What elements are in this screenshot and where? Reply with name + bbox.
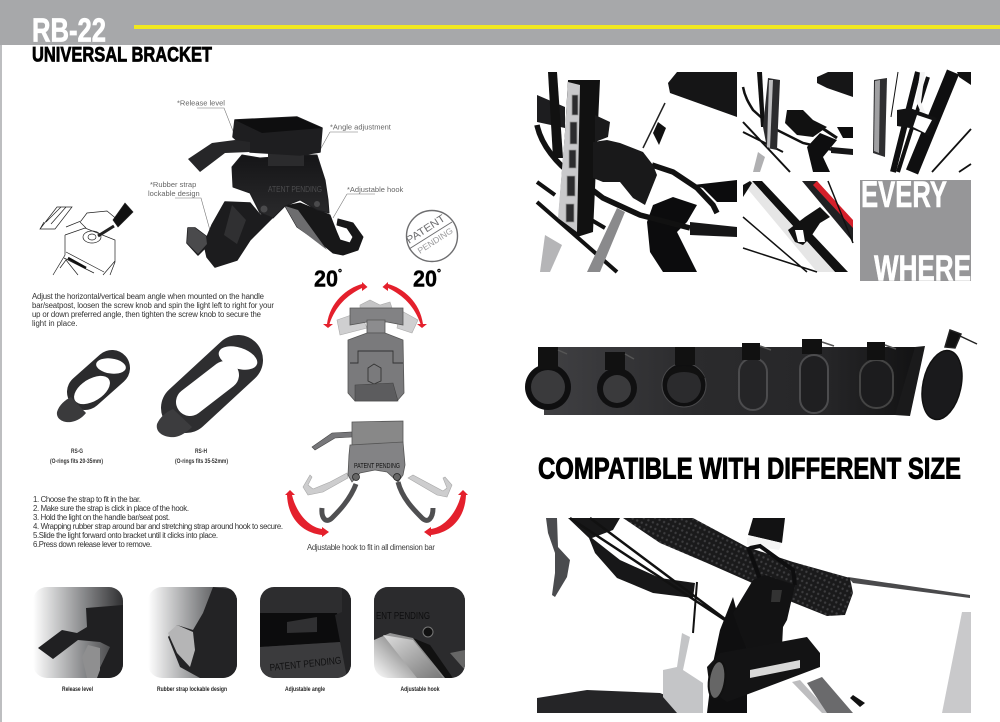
labels: twenty degrees: ° [437, 268, 441, 279]
text block: steps: 4. Wrapping rubber strap around bar and stretching strap around hook to secure. [33, 522, 283, 531]
stamp: patent pending [404, 210, 458, 262]
callout text [148, 98, 404, 198]
photo: handlebar mount [537, 518, 971, 713]
thumbnail: adjustable hook [374, 587, 465, 678]
labels: twenty degrees: 20 [413, 266, 437, 292]
callout text: *Angle adjustment [330, 122, 392, 132]
diagram: adjustable hook front view: PATENT PENDING [354, 463, 400, 470]
arrows: hook red [285, 490, 468, 537]
thumbnail: release level [33, 587, 123, 678]
callout text: *Rubber strap [150, 180, 196, 189]
photo: rear rack mount [743, 181, 853, 272]
top block [233, 117, 322, 155]
photo: rear mount [873, 72, 971, 172]
lever [188, 140, 250, 172]
arrows: rotation red [323, 282, 427, 328]
thumbnail: adjustable angle [260, 587, 351, 678]
captions: thumbnails [62, 686, 440, 693]
product photo: bracket with callouts: ATENT PENDING [268, 185, 322, 194]
clamp one [525, 347, 571, 410]
labels: twenty degrees [314, 266, 441, 292]
thumbnail: adjustable angle: PATENT PENDING [269, 655, 342, 674]
captions: strap sizes [50, 448, 228, 465]
captions: thumbnails: Release level [62, 686, 93, 693]
text block: steps: 1. Choose the strap to fit in the bar. [33, 495, 141, 504]
text block: angle adjustment: light in place. [32, 319, 78, 328]
stamp: patent pending: PENDING [416, 226, 455, 256]
open end of tube [916, 347, 968, 423]
callout text: *Adjustable hook [347, 185, 404, 194]
diagram: adjustable hook front view [303, 421, 452, 520]
labels: twenty degrees: ° [338, 268, 342, 279]
text block: steps: 2. Make sure the strap is click in place of the hook. [33, 504, 189, 513]
product photo: strap RS-G [57, 356, 127, 422]
callout text: lockable design [148, 189, 200, 198]
panel: everywhere [860, 174, 971, 288]
text block: angle adjustment: bar/seatpost, loosen the screw knob and spin the light left to right for your [32, 301, 274, 310]
hook right [285, 203, 363, 255]
clamp four [739, 343, 771, 410]
photo: brackets on tubes [525, 330, 977, 423]
captions: strap sizes: (O-rings fits 20-35mm) [50, 458, 103, 465]
text block: angle adjustment: up or down preferred angle, then tighten the screw knob to secure the [32, 310, 261, 319]
photo: mount close view [743, 72, 853, 172]
leader lines [175, 108, 375, 234]
captions: thumbnails: Rubber strap lockable design [157, 686, 227, 693]
thumbnail: adjustable hook: ENT PENDING [376, 611, 430, 622]
product photo: bracket with callouts [148, 98, 404, 267]
captions: strap sizes: RS-H [195, 448, 207, 455]
product photo: strap RS-H [157, 342, 260, 437]
clamp five [800, 339, 834, 413]
captions: thumbnails: Adjustable angle [285, 686, 325, 693]
photo: seatpost mount large [537, 72, 737, 272]
diagram: bracket rear view [337, 300, 418, 401]
hook left [187, 202, 277, 267]
text block: steps: 6.Press down release lever to remove. [33, 540, 152, 549]
text block: angle adjustment [32, 292, 274, 328]
heading: universal bracket: UNIVERSAL BRACKET [32, 42, 212, 66]
callout text: *Release level [177, 98, 225, 108]
thumbnail: rubber strap [148, 587, 237, 678]
clamp three [662, 347, 706, 407]
text block: steps: 3. Hold the light on the handle bar/seat post. [33, 513, 170, 522]
labels: twenty degrees: 20 [314, 266, 338, 292]
clamp two [597, 352, 637, 408]
stamp: patent pending: PATENT [404, 212, 448, 247]
captions: thumbnails: Adjustable hook [400, 686, 440, 693]
caption: adjustable hook: Adjustable hook to fit in all dimension bar [307, 543, 435, 552]
title: RB-22: RB-22 [32, 12, 106, 48]
text block: steps [33, 495, 283, 549]
panel: everywhere: EVERY [861, 174, 947, 215]
text block: steps: 5.Slide the light forward onto bracket until it clicks into place. [33, 531, 218, 540]
captions: strap sizes: RS-G [71, 448, 83, 455]
body [232, 155, 329, 218]
icon: screwdriver adjustment sketch [40, 203, 133, 275]
text block: angle adjustment: Adjust the horizontal/vertical beam angle when mounted on the handle [32, 292, 264, 301]
captions: strap sizes: (O-rings fits 35-52mm) [175, 458, 228, 465]
clamp six [860, 342, 896, 408]
